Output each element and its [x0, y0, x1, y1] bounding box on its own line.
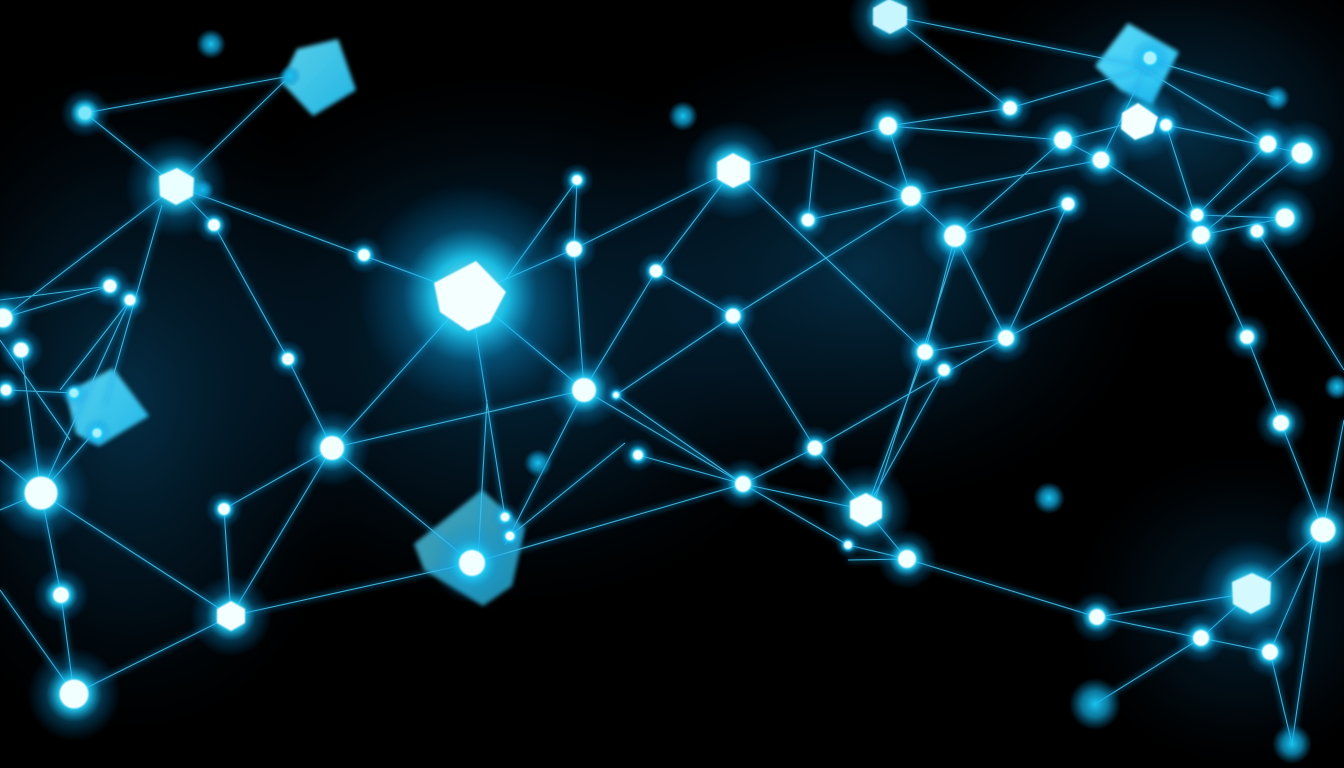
large hexagonal hub nodes [159, 0, 1271, 631]
hub: main central pentagon [434, 261, 506, 331]
translucent polyhedra [66, 23, 1179, 606]
